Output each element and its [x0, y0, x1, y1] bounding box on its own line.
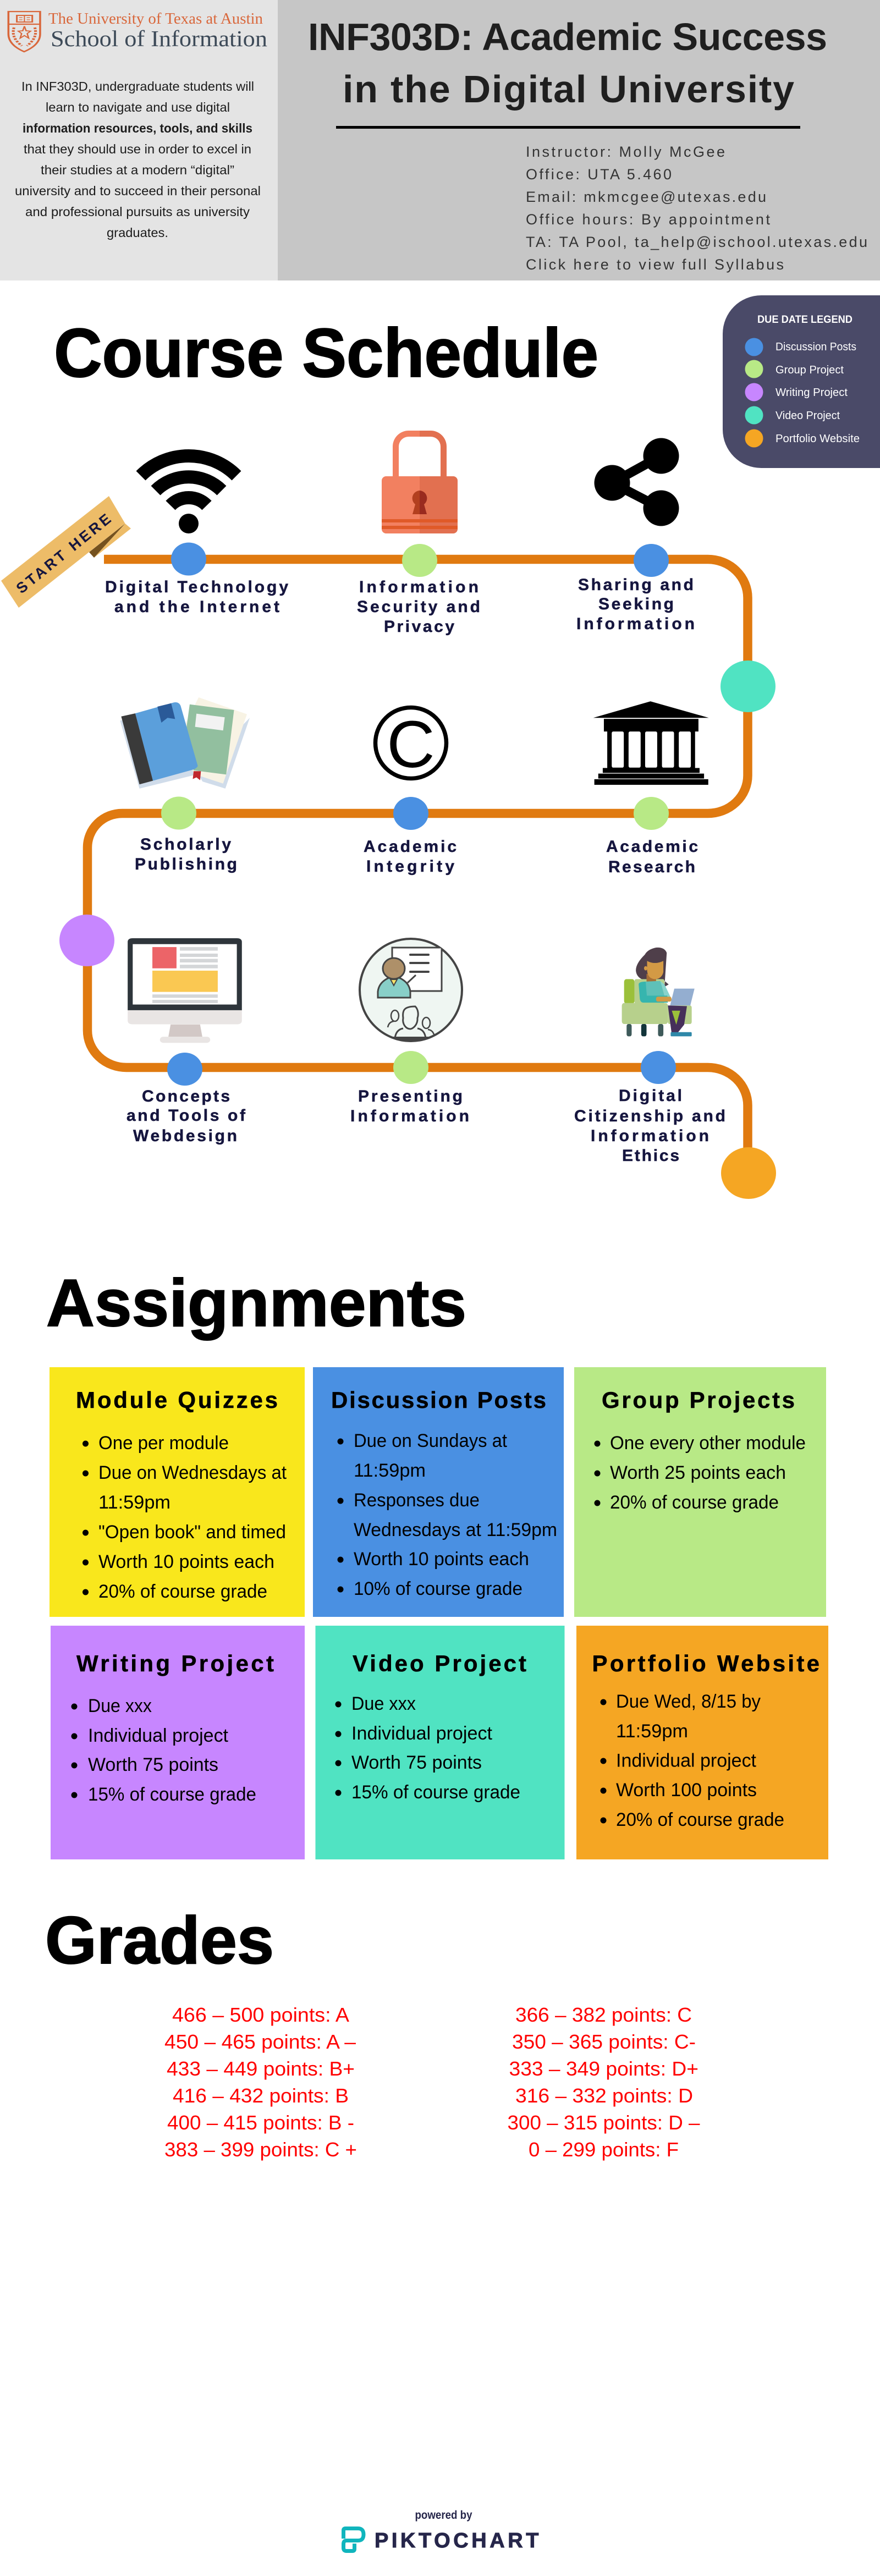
- module: digital citizenship: [574, 948, 725, 1165]
- text block: grade scale column one: 416 – 432 points: B: [173, 2084, 349, 2107]
- card: portfolio website: [576, 1626, 828, 1859]
- panel: course intro: [0, 0, 278, 280]
- module: presenting information: [350, 939, 469, 1125]
- module: sharing and seeking: Seeking: [598, 595, 674, 613]
- milestone: writing project: [59, 915, 114, 966]
- module: information security: Information: [359, 578, 479, 596]
- module: information security: [357, 431, 480, 636]
- text block: grade scale column two: 366 – 382 points: C: [515, 2003, 692, 2026]
- card: writing project: Due xxx: [88, 1696, 152, 1716]
- icon: monitor: [128, 938, 242, 1043]
- module: information security: Privacy: [384, 618, 454, 636]
- card: module quizzes: Due on Wednesdays at: [98, 1462, 287, 1483]
- icon: Piktochart logo: [343, 2529, 364, 2551]
- text block: grade scale column one: 433 – 449 points: B+: [167, 2057, 355, 2080]
- card: discussion posts: 11:59pm: [354, 1460, 426, 1481]
- card: portfolio website: 20% of course grade: [616, 1809, 784, 1830]
- card: module quizzes: One per module: [98, 1433, 229, 1454]
- milestone: video project: [721, 660, 776, 712]
- module: academic integrity: Academic: [364, 838, 457, 856]
- card: video project: Worth 75 points: [351, 1752, 482, 1773]
- text block: course description: information resources, tools, and skills: [23, 121, 252, 135]
- card: module quizzes: "Open book" and timed: [98, 1522, 286, 1543]
- text block: course description: graduates.: [107, 225, 168, 240]
- title: [308, 15, 827, 111]
- legend: due date legend: Discussion Posts: [776, 341, 856, 353]
- title: in the Digital University: [343, 68, 794, 111]
- card: video project: Due xxx: [351, 1693, 416, 1714]
- module: webdesign: and Tools of: [127, 1107, 246, 1125]
- module: academic integrity: [364, 707, 457, 876]
- module: presenting information: Information: [350, 1107, 469, 1125]
- legend: due date legend: Video Project: [776, 410, 840, 422]
- text block: instructor details: Click here to view full Syllabus: [526, 256, 784, 273]
- text block: instructor details: Instructor: Molly McGee: [526, 144, 725, 160]
- module: digital technology: and the Internet: [114, 598, 279, 616]
- text block: course description: and professional pursuits as university: [25, 205, 250, 219]
- text block: grade scale column two: 350 – 365 points: C-: [512, 2030, 696, 2053]
- card: video project: [316, 1626, 564, 1859]
- footer: powered by Piktochart: [343, 2509, 539, 2552]
- card: discussion posts: Worth 10 points each: [354, 1549, 529, 1570]
- module: scholarly publishing: [120, 697, 250, 873]
- banner: start here: START HERE: [13, 510, 114, 597]
- text block: grade scale column two: 333 – 349 points: D+: [509, 2057, 698, 2080]
- text block: instructor details: Email: mkmcgee@utexas.edu: [526, 189, 766, 205]
- text block: course description: learn to navigate and use digital: [46, 100, 230, 114]
- legend: due date legend: DUE DATE LEGEND: [757, 314, 853, 326]
- icon: padlock: [382, 431, 458, 533]
- card: video project: 15% of course grade: [351, 1782, 520, 1803]
- card: portfolio website: 11:59pm: [616, 1721, 688, 1742]
- path: course timeline track: [87, 559, 748, 1173]
- footer: powered by Piktochart: powered by: [415, 2509, 472, 2522]
- footer: powered by Piktochart: PIKTOCHART: [375, 2529, 539, 2552]
- card: writing project: Individual project: [88, 1725, 229, 1746]
- card: portfolio website: Worth 100 points: [616, 1780, 757, 1801]
- module: academic research: Academic: [606, 838, 698, 856]
- icon: wifi: [141, 456, 237, 533]
- icon: copyright: [375, 707, 447, 781]
- card: module quizzes: 11:59pm: [98, 1492, 170, 1513]
- legend: due date legend: Portfolio Website: [776, 433, 860, 445]
- module: information security: Security and: [357, 598, 480, 616]
- module: academic integrity: Integrity: [366, 857, 454, 876]
- module: scholarly publishing: Scholarly: [140, 835, 231, 854]
- card: group projects: Worth 25 points each: [610, 1462, 786, 1483]
- text block: instructor details: Office hours: By appointment: [526, 211, 770, 228]
- icon: copyright: C: [387, 707, 435, 781]
- module: digital citizenship: Citizenship and: [574, 1107, 725, 1125]
- text block: course description: [15, 79, 261, 240]
- text block: instructor details: [526, 144, 867, 273]
- icon: presenter: [360, 939, 462, 1041]
- card: discussion posts: Wednesdays at 11:59pm: [354, 1520, 557, 1540]
- card: discussion posts: Responses due: [354, 1490, 480, 1511]
- text block: grade scale column two: 316 – 332 points: D: [515, 2084, 693, 2107]
- legend: due date legend: Group Project: [776, 364, 844, 376]
- module: presenting information: Presenting: [358, 1087, 463, 1105]
- legend: due date legend: [723, 295, 880, 468]
- heading: Grades: Grades: [45, 1903, 274, 1978]
- card: discussion posts: Due on Sundays at: [354, 1430, 508, 1451]
- card: writing project: Writing Project: [76, 1650, 274, 1676]
- module: digital citizenship: Ethics: [622, 1147, 679, 1165]
- text block: grade scale column one: [164, 2003, 357, 2161]
- legend: due date legend: Writing Project: [776, 387, 848, 399]
- card: group projects: One every other module: [610, 1433, 806, 1454]
- card: module quizzes: Module Quizzes: [76, 1387, 278, 1413]
- logo text: university: The University of Texas at Austin: [48, 10, 263, 27]
- milestone: portfolio website: [721, 1147, 776, 1199]
- module: digital technology: [105, 456, 288, 616]
- module: webdesign: Webdesign: [133, 1127, 237, 1145]
- card: video project: Individual project: [351, 1723, 493, 1744]
- module: scholarly publishing: Publishing: [135, 855, 237, 873]
- banner: start here: [1, 496, 131, 608]
- card: portfolio website: Due Wed, 8/15 by: [616, 1691, 761, 1712]
- card: portfolio website: Portfolio Website: [592, 1650, 820, 1676]
- icon: share: [594, 438, 679, 526]
- card: module quizzes: [50, 1367, 305, 1617]
- module: webdesign: Concepts: [142, 1087, 230, 1105]
- panel: course title and instructor: [278, 0, 880, 280]
- card: discussion posts: 10% of course grade: [354, 1578, 522, 1599]
- card: video project: Video Project: [353, 1650, 526, 1676]
- text block: grade scale column one: 466 – 500 points: A: [172, 2003, 349, 2026]
- module: sharing and seeking: Sharing and: [578, 576, 694, 594]
- icon: books: [120, 697, 250, 789]
- icon: temple: [593, 701, 709, 785]
- logo text: school: School of Information: [51, 26, 267, 51]
- text block: course description: In INF303D, undergraduate students will: [21, 79, 254, 93]
- card: module quizzes: Worth 10 points each: [98, 1551, 274, 1572]
- card: portfolio website: Individual project: [616, 1750, 757, 1771]
- text block: grade scale column two: [507, 2003, 700, 2161]
- text block: course description: their studies at a modern “digital”: [41, 163, 234, 177]
- text block: instructor details: Office: UTA 5.460: [526, 166, 672, 183]
- card: discussion posts: Discussion Posts: [331, 1387, 546, 1413]
- module: sharing and seeking: [576, 438, 695, 633]
- card: module quizzes: 20% of course grade: [98, 1581, 267, 1602]
- module: digital citizenship: Digital: [619, 1087, 682, 1105]
- module: academic research: [593, 701, 709, 876]
- module: webdesign: [127, 938, 246, 1145]
- card: group projects: [574, 1367, 826, 1617]
- module: digital technology: Digital Technology: [105, 578, 288, 596]
- text block: grade scale column two: 300 – 315 points: D –: [507, 2111, 700, 2134]
- icon: woman with laptop: [622, 948, 695, 1036]
- heading: Course Schedule: Course Schedule: [54, 315, 598, 392]
- text block: grade scale column one: 450 – 465 points: A –: [164, 2030, 356, 2053]
- text block: grade scale column one: 400 – 415 points: B -: [167, 2111, 354, 2134]
- card: discussion posts: [313, 1367, 564, 1617]
- text block: instructor details: TA: TA Pool, ta_help@ischool.utexas.edu: [526, 234, 867, 250]
- card: writing project: [51, 1626, 305, 1859]
- module: sharing and seeking: Information: [576, 615, 695, 633]
- icon: UT shield: [8, 12, 40, 52]
- module: academic research: Research: [608, 858, 695, 876]
- card: group projects: 20% of course grade: [610, 1492, 779, 1513]
- logo: University of Texas School of Information: [8, 10, 267, 52]
- card: writing project: Worth 75 points: [88, 1754, 218, 1775]
- text block: course description: university and to succeed in their personal: [15, 184, 261, 198]
- title: INF303D: Academic Success: [308, 15, 827, 58]
- module: digital citizenship: Information: [591, 1127, 709, 1145]
- card: group projects: Group Projects: [602, 1387, 795, 1413]
- card: writing project: 15% of course grade: [88, 1784, 256, 1805]
- text block: grade scale column one: 383 – 399 points: C +: [164, 2138, 357, 2161]
- text block: grade scale column two: 0 – 299 points: F: [529, 2138, 679, 2161]
- heading: Assignments: Assignments: [46, 1265, 466, 1340]
- text block: course description: that they should use in order to excel in: [24, 142, 251, 156]
